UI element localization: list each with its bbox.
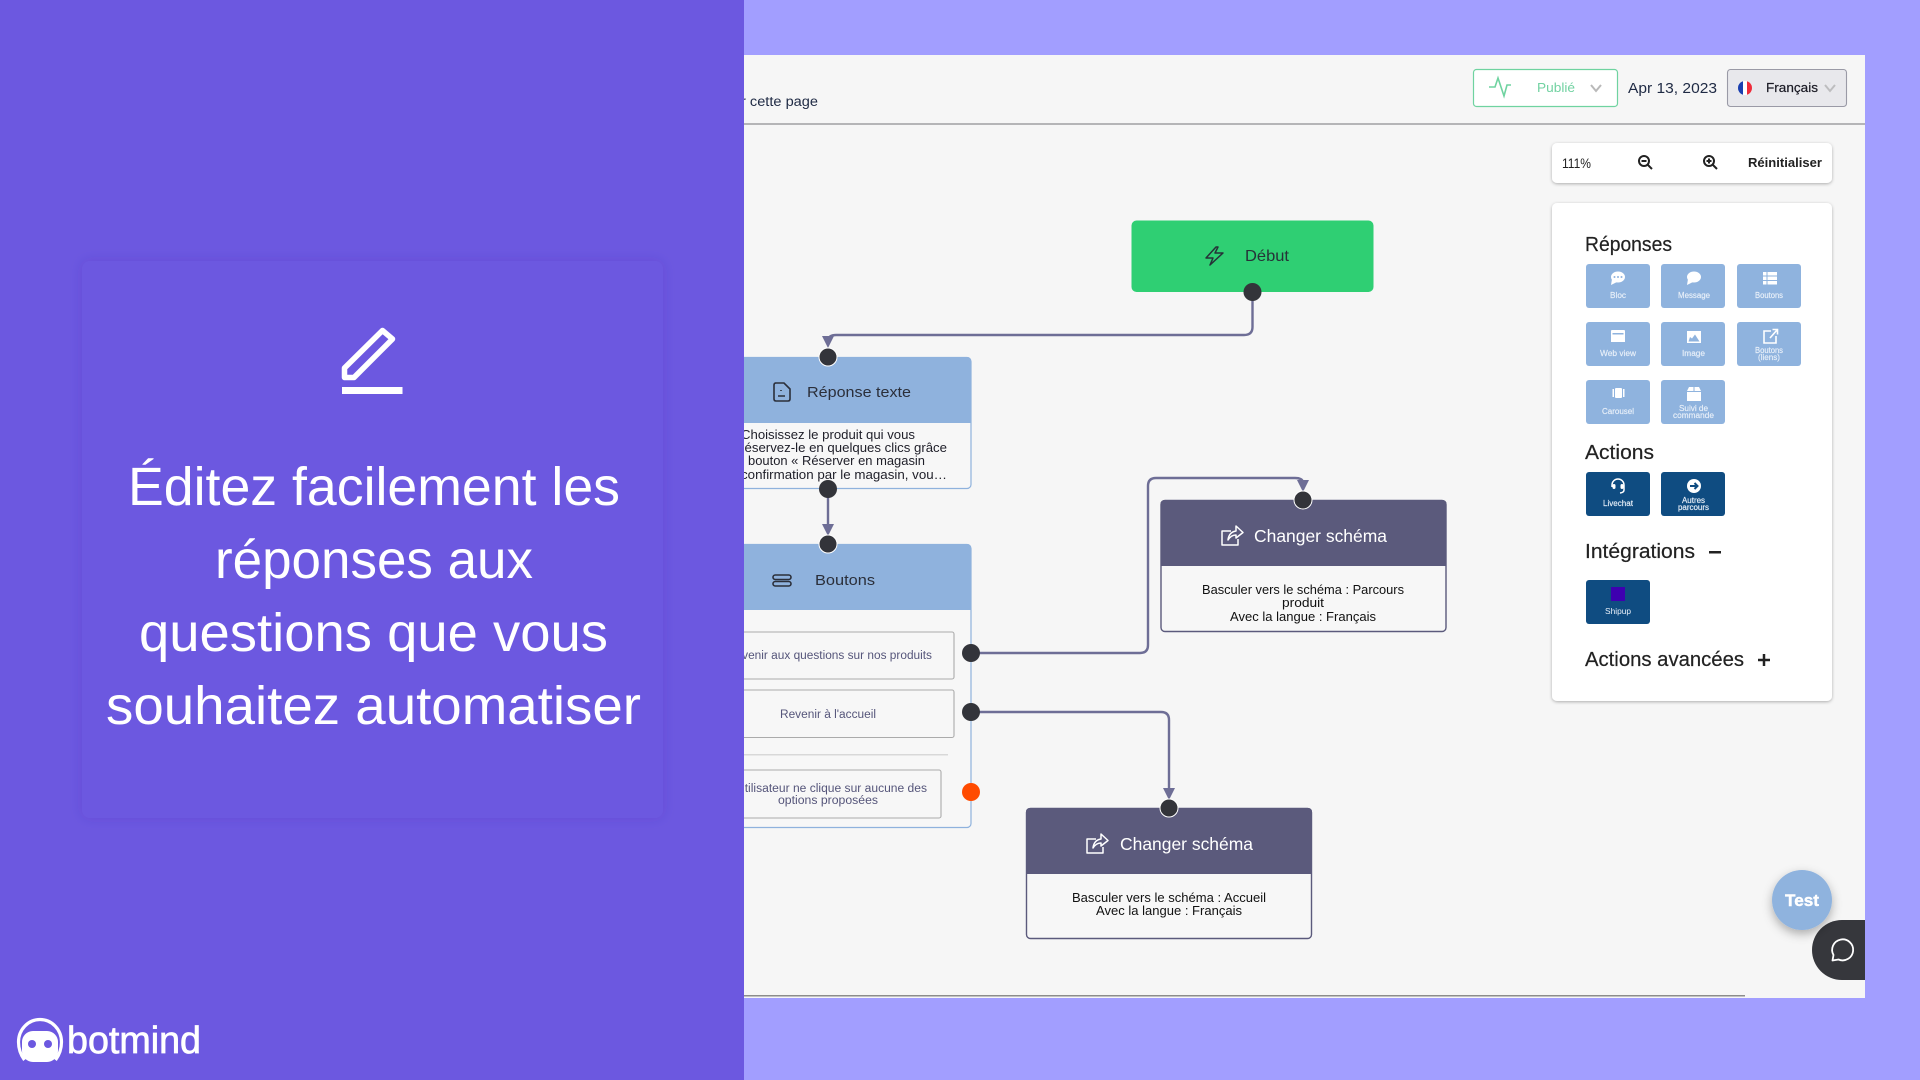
node: Boutons bbox=[685, 544, 971, 828]
heading text: Éditez facilement les bbox=[128, 457, 620, 517]
connector lines bbox=[828, 292, 1303, 790]
option button 1 bbox=[700, 632, 954, 679]
response tiles: Boutons bbox=[1755, 291, 1783, 300]
node: Changer schéma (Parcours produit) bbox=[1160, 500, 1446, 632]
node: Début: Début bbox=[1245, 248, 1290, 265]
icon: chat bubble bbox=[1832, 939, 1853, 960]
page link text: r cette page bbox=[741, 94, 818, 109]
icon: arrow circle bbox=[1687, 479, 1701, 493]
action tiles: Livechat bbox=[1603, 499, 1634, 508]
heading: Actions avancées: Actions avancées bbox=[1585, 649, 1744, 671]
language selector bbox=[1728, 70, 1846, 106]
icon: share bbox=[1222, 526, 1243, 545]
node: Boutons: Boutons bbox=[815, 572, 875, 589]
icon: share bbox=[1087, 834, 1108, 853]
node: Réponse texte bbox=[685, 357, 971, 488]
fallback option button: L'utilisateur ne clique sur aucune des bbox=[729, 783, 927, 795]
action tiles bbox=[1586, 472, 1725, 516]
botmind logo: botmind bbox=[67, 1020, 201, 1062]
response tiles: commande bbox=[1673, 411, 1715, 420]
node: Changer schéma (Parcours produit): Avec la langue : Français bbox=[1230, 609, 1376, 624]
app header bar bbox=[741, 70, 1865, 125]
icon: zoom in bbox=[1704, 156, 1717, 169]
response tiles: Suivi de bbox=[1679, 404, 1709, 413]
scrollbar line bbox=[744, 995, 1745, 996]
heading text: questions que vous bbox=[139, 603, 608, 663]
heading: Actions: Actions bbox=[1585, 442, 1654, 464]
fallback option button: options proposées bbox=[778, 795, 878, 807]
left panel bbox=[0, 0, 744, 1080]
response tiles: Message bbox=[1678, 291, 1711, 300]
zoom control card bbox=[1552, 143, 1832, 183]
body text: Choisissez le produit qui vous bbox=[741, 427, 915, 442]
node: Réponse texte: Réponse texte bbox=[807, 384, 911, 401]
zoom control card: 111% bbox=[1562, 155, 1591, 171]
icon: zoom out bbox=[1639, 156, 1652, 169]
chat launcher bbox=[1812, 920, 1865, 980]
node: Changer schéma (Parcours produit): produit bbox=[1282, 595, 1324, 610]
response tiles: Image bbox=[1682, 349, 1706, 358]
action tiles: Autres bbox=[1682, 496, 1705, 505]
response tiles: Carousel bbox=[1602, 407, 1634, 416]
icon: lightning bbox=[1206, 247, 1223, 265]
response tiles: (liens) bbox=[1758, 353, 1780, 362]
body text: bouton « Réserver en magasin bbox=[748, 453, 925, 468]
node: Changer schéma (Accueil) bbox=[1026, 808, 1312, 938]
heading text bbox=[106, 457, 641, 736]
connector dots bbox=[819, 283, 1312, 817]
callout card bbox=[82, 261, 663, 818]
heading: Réponses: Réponses bbox=[1585, 234, 1672, 256]
action tiles: parcours bbox=[1678, 503, 1709, 512]
status selector bbox=[1474, 70, 1618, 106]
option button 2: Revenir à l'accueil bbox=[780, 709, 876, 721]
icon: pencil bbox=[342, 330, 402, 394]
node: Changer schéma (Parcours produit): Basculer vers le schéma : Parcours bbox=[1202, 582, 1404, 597]
panel: app window bbox=[685, 55, 1865, 998]
response tiles: Boutons bbox=[1755, 346, 1783, 355]
node: Changer schéma (Accueil): Basculer vers le schéma : Accueil bbox=[1072, 890, 1266, 905]
response tiles: Web view bbox=[1600, 349, 1636, 358]
heading: Intégrations: Intégrations bbox=[1585, 541, 1695, 563]
status selector: Publié bbox=[1537, 80, 1575, 95]
integration tile: Shipup bbox=[1586, 580, 1650, 624]
zoom control card: Réinitialiser bbox=[1748, 155, 1822, 170]
node: Changer schéma (Accueil): Changer schéma bbox=[1120, 834, 1253, 854]
option button 1: Revenir aux questions sur nos produits bbox=[727, 650, 932, 662]
icon: robot head bbox=[18, 1020, 62, 1062]
language selector: Français bbox=[1766, 80, 1819, 95]
body text: confirmation par le magasin, vou… bbox=[741, 467, 947, 482]
test button: Test bbox=[1785, 891, 1819, 910]
tile icons bbox=[1611, 272, 1777, 401]
test button bbox=[1772, 870, 1832, 930]
icon: stacked rows bbox=[773, 575, 791, 586]
icon: headset bbox=[1612, 479, 1624, 493]
response tiles: Bloc bbox=[1610, 291, 1626, 300]
node: Changer schéma (Accueil): Avec la langue : Français bbox=[1096, 903, 1242, 918]
heading text: réponses aux bbox=[215, 530, 533, 590]
response tiles bbox=[1586, 264, 1801, 424]
option button 2 bbox=[700, 690, 954, 738]
arrowheads bbox=[822, 336, 1309, 800]
icon: document bbox=[774, 383, 790, 401]
body text bbox=[735, 427, 947, 482]
node: Changer schéma (Parcours produit): Changer schéma bbox=[1254, 526, 1387, 546]
palette card bbox=[1552, 203, 1832, 701]
date: Apr 13, 2023 bbox=[1628, 80, 1717, 97]
integration tile: Shipup: Shipup bbox=[1605, 607, 1632, 616]
body text: Réservez-le en quelques clics grâce bbox=[735, 440, 947, 455]
fallback option button bbox=[700, 770, 941, 818]
node: Début bbox=[1132, 220, 1374, 292]
heading text: souhaitez automatiser bbox=[106, 676, 641, 736]
